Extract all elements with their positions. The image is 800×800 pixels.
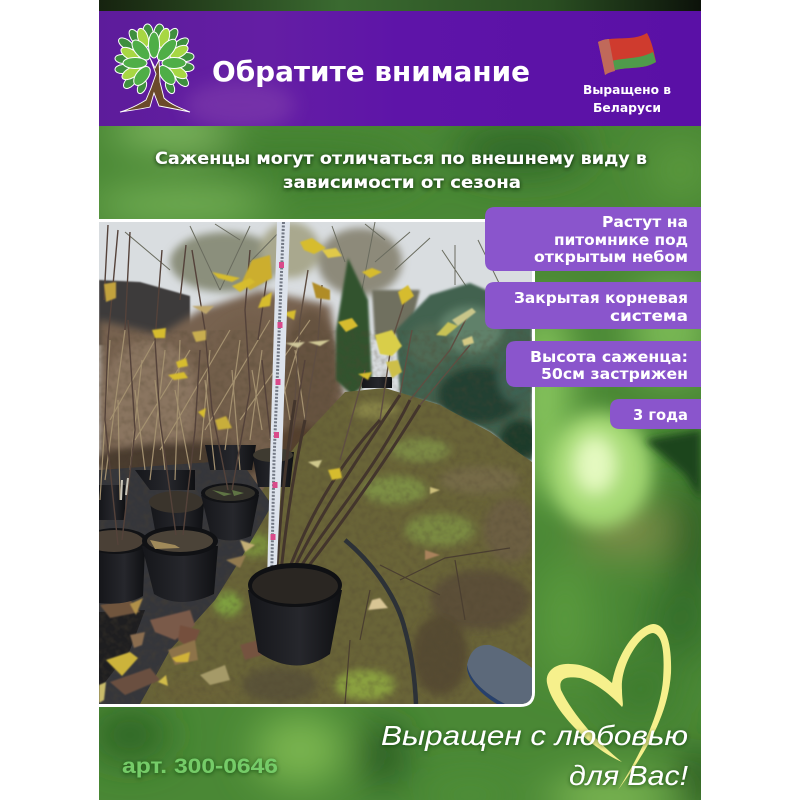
- bushes: [99, 285, 348, 491]
- photo: potted shrub in nursery: [84, 222, 540, 704]
- twigs on ground: [345, 548, 510, 704]
- pill: closed root system: Закрытая корневая: [514, 289, 688, 307]
- photo frame: [84, 219, 540, 707]
- pill: seedling height: Высота саженца:: [530, 348, 688, 366]
- texture: [99, 330, 532, 704]
- yellow leaves: [104, 238, 476, 480]
- pill: grows outdoors: Растут на: [602, 213, 688, 231]
- pill: seedling height: [506, 341, 701, 387]
- icon: tree logo: [115, 23, 194, 112]
- pill: age: 3 года: [633, 406, 688, 424]
- weed mat: [99, 460, 272, 704]
- pill: grows outdoors: питомнике под: [554, 231, 688, 249]
- slogan: для Вас!: [569, 760, 688, 791]
- measuring tape: [267, 222, 290, 584]
- fallen leaves: [99, 487, 440, 703]
- bare stems: [100, 320, 310, 500]
- conifer: [336, 258, 372, 395]
- icon: yellow heart: [547, 624, 671, 790]
- pill: grows outdoors: [485, 207, 701, 271]
- text: grown in Belarus: [583, 83, 671, 115]
- panel: purple header: [99, 11, 701, 129]
- pill: age: [610, 399, 701, 429]
- text: grown in Belarus: Беларуси: [593, 101, 661, 115]
- main shrub stems: [276, 395, 420, 582]
- main pot: [248, 563, 342, 666]
- pill: grows outdoors: открытым небом: [534, 248, 688, 266]
- background trees: [170, 222, 402, 296]
- article number: арт. 300-0646: [122, 754, 278, 778]
- pot: [142, 546, 218, 602]
- back pots: [99, 377, 392, 520]
- boot: [467, 645, 532, 704]
- icon: Belarus flag: [598, 33, 656, 75]
- slogan: [381, 720, 688, 791]
- pill: seedling height: 50см застрижен: [541, 365, 688, 383]
- subtitle: зависимости от сезона: [283, 172, 521, 192]
- pot: [99, 548, 145, 604]
- ground: [99, 388, 532, 704]
- shed: [99, 280, 190, 345]
- slogan: Выращен с любовью: [381, 720, 688, 751]
- panel: blurred green card background: [90, 0, 720, 800]
- hedge: [396, 283, 532, 462]
- pot: [150, 503, 204, 530]
- title: Обратите внимание: [212, 56, 530, 88]
- pill: closed root system: [485, 282, 701, 329]
- pill: closed root system: система: [610, 307, 688, 325]
- hose: [345, 540, 416, 704]
- subtitle: [155, 148, 647, 192]
- subtitle: Саженцы могут отличаться по внешнему виду в: [155, 148, 647, 168]
- pot: [201, 495, 259, 540]
- text: grown in Belarus: Выращено в: [583, 83, 671, 97]
